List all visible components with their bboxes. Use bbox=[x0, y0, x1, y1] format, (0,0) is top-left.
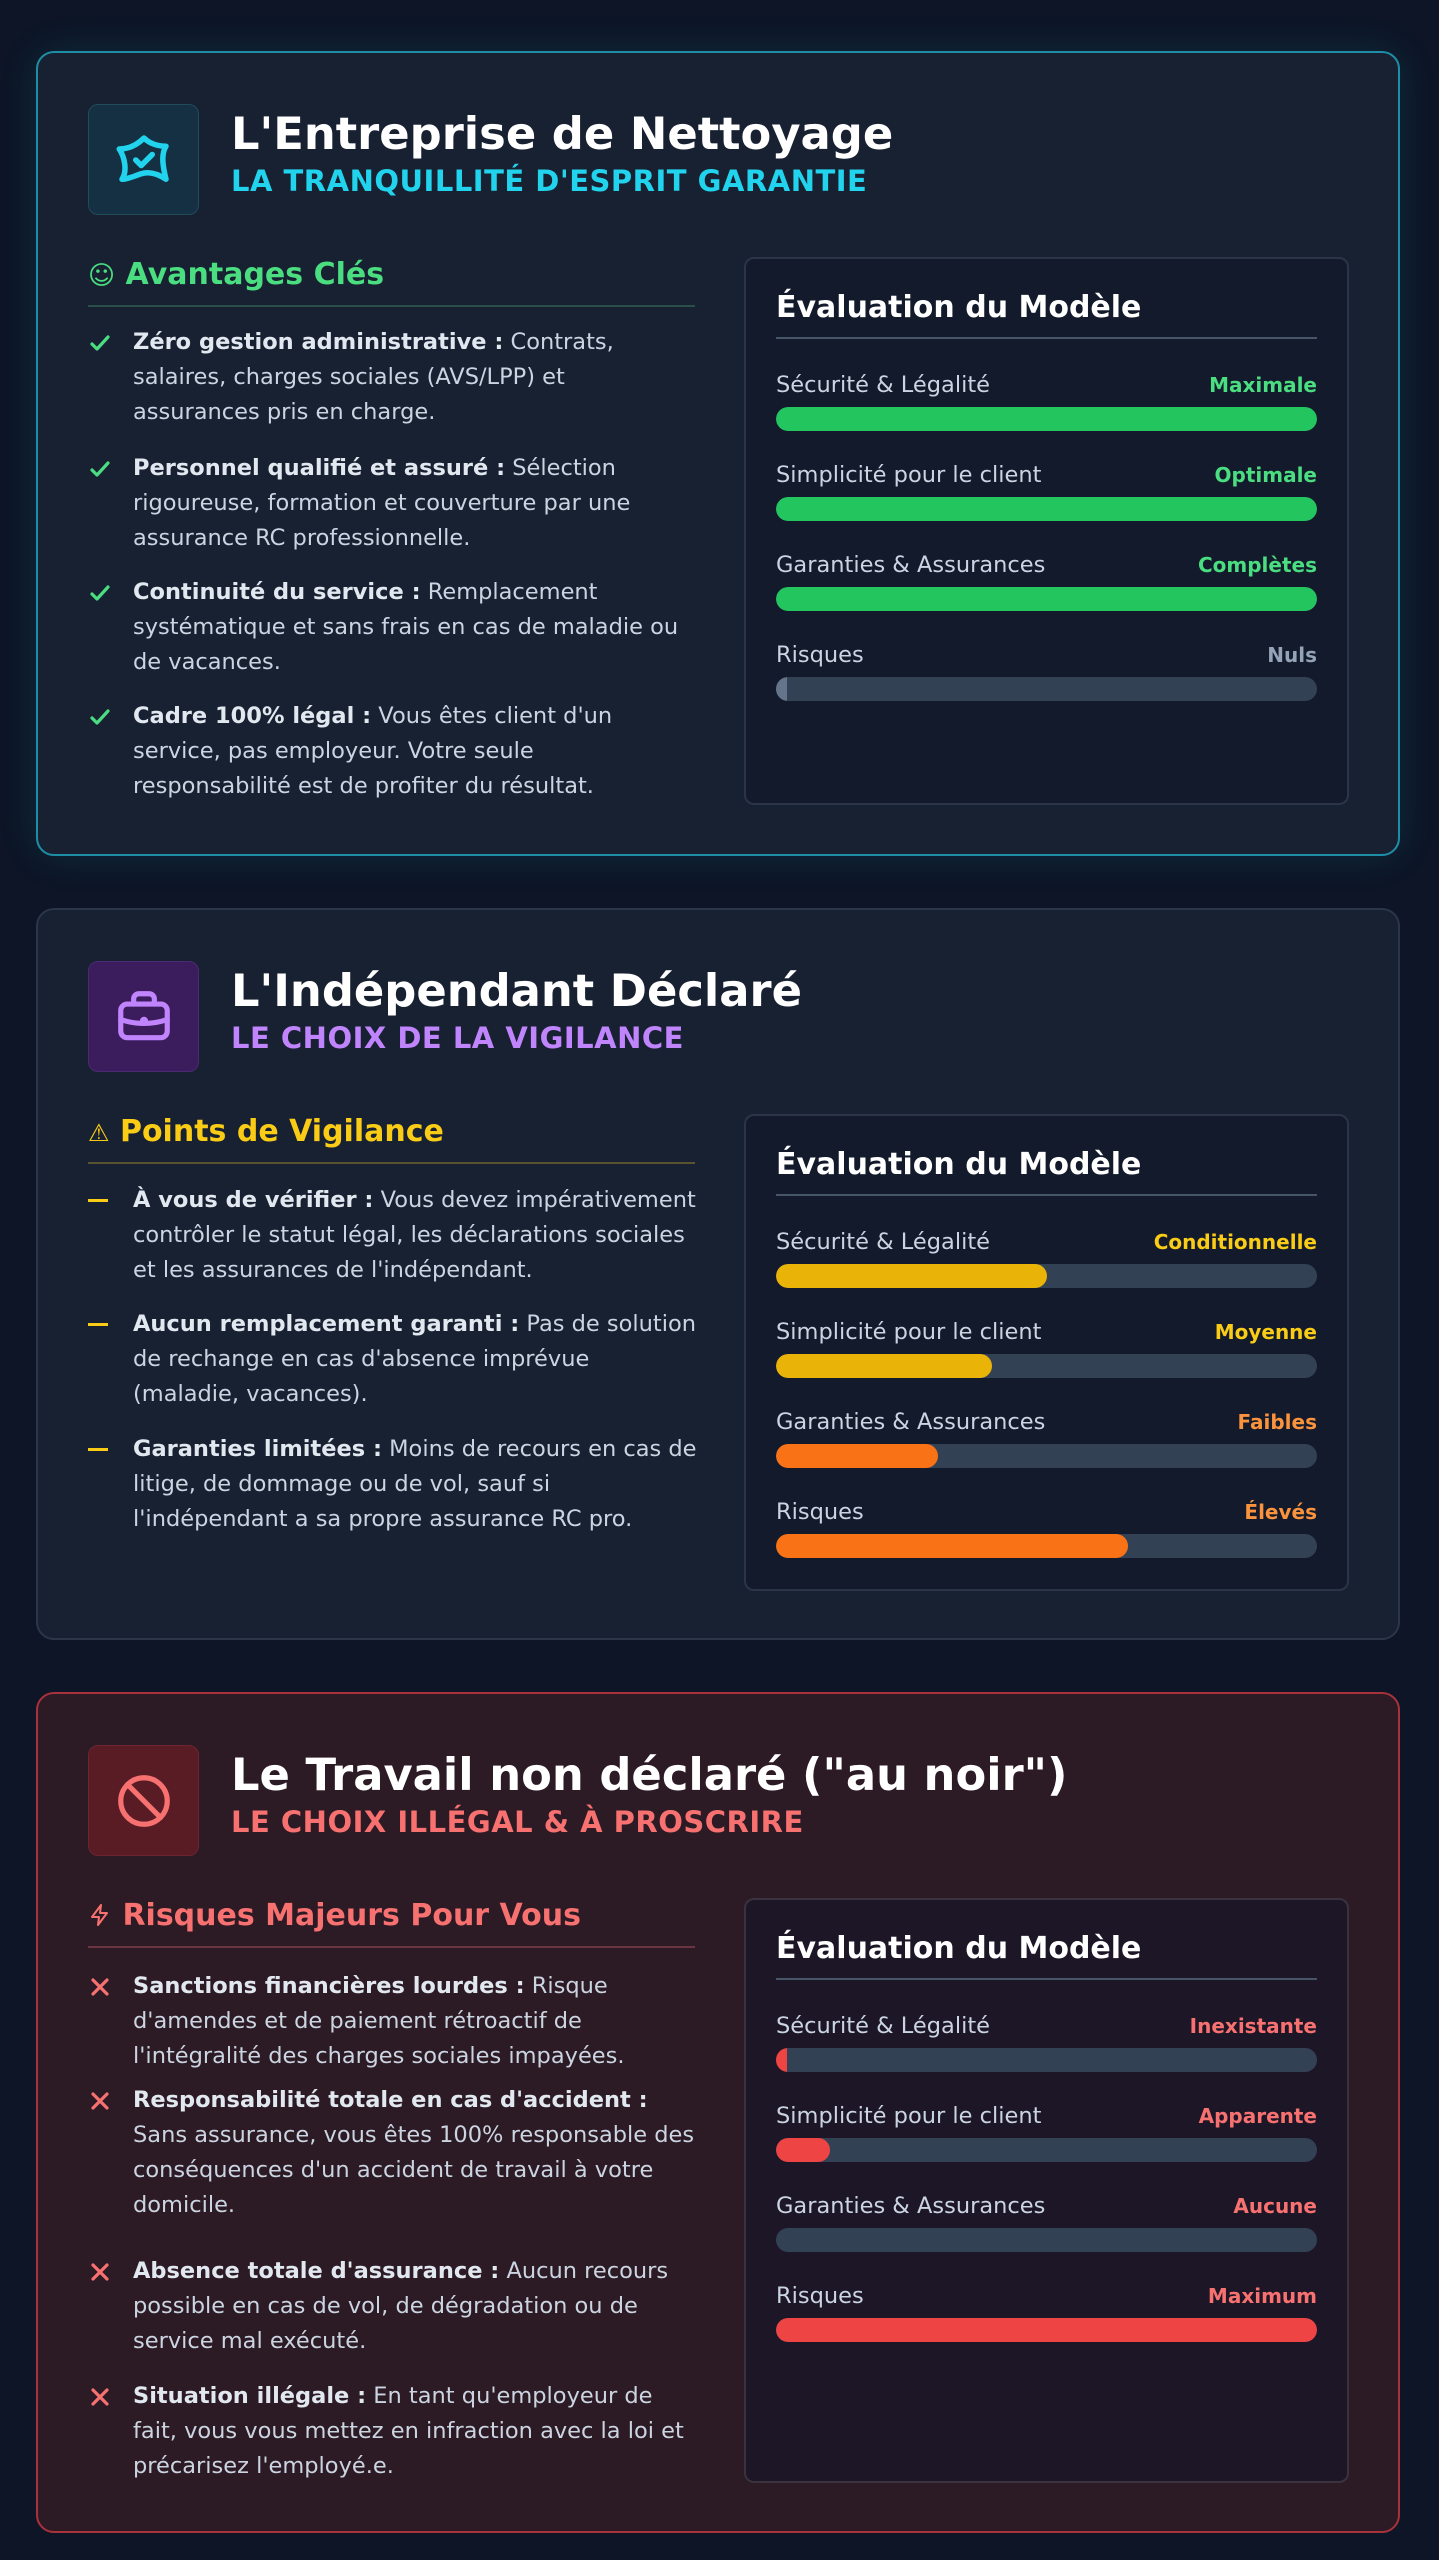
bar: garanties: Faibles bbox=[1238, 1410, 1317, 1434]
panel: travail non déclaré: Absence totale d'assurance : Aucun recours bbox=[133, 2258, 668, 2284]
bar: risques: Risques bbox=[776, 2283, 864, 2309]
icon: briefcase bbox=[88, 961, 199, 1072]
evaluation box bbox=[744, 1898, 1349, 2483]
panel: travail non déclaré: précarisez l'employé.e. bbox=[133, 2453, 394, 2479]
evaluation box bbox=[744, 257, 1349, 805]
bar: simplicité: Optimale bbox=[1214, 463, 1317, 487]
panel: travail non déclaré: Responsabilité totale en cas d'accident : bbox=[133, 2087, 648, 2113]
title: L'Entreprise de Nettoyage bbox=[231, 107, 893, 160]
evaluation box: Évaluation du Modèle bbox=[776, 290, 1141, 325]
panel: travail non déclaré: d'amendes et de paiement rétroactif de bbox=[133, 2008, 582, 2034]
list item 2 bbox=[91, 2087, 694, 2218]
heading: risques majeurs bbox=[88, 1898, 695, 1948]
bar: garanties: Complètes bbox=[1198, 553, 1317, 577]
bar: risques bbox=[776, 2283, 1317, 2342]
bar: garanties: Garanties & Assurances bbox=[776, 1409, 1045, 1435]
panel: entreprise de nettoyage: rigoureuse, formation et couverture par une bbox=[133, 490, 630, 516]
panel: indépendant déclaré: de rechange en cas d'absence imprévue bbox=[133, 1346, 589, 1372]
list item 3 bbox=[90, 579, 678, 675]
panel: indépendant déclaré: Garanties limitées : Moins de recours en cas de bbox=[133, 1436, 697, 1462]
list item 1 bbox=[88, 1186, 696, 1283]
list item 3 bbox=[91, 2258, 668, 2354]
bar: sécurité: Sécurité & Légalité bbox=[776, 1229, 990, 1255]
list item 4 bbox=[91, 2383, 684, 2479]
subtitle: LE CHOIX ILLÉGAL & À PROSCRIRE bbox=[231, 1805, 804, 1839]
list item 2 bbox=[88, 1311, 696, 1407]
bar: risques: Maximum bbox=[1208, 2284, 1317, 2308]
panel: indépendant déclaré: À vous de vérifier : Vous devez impérativement bbox=[133, 1187, 696, 1213]
panel: travail non déclaré bbox=[36, 1692, 1400, 2533]
bar: risques: Élevés bbox=[1244, 1500, 1317, 1524]
panel: entreprise de nettoyage: Personnel qualifié et assuré : Sélection bbox=[133, 455, 616, 481]
panel: entreprise de nettoyage: responsabilité est de profiter du résultat. bbox=[133, 773, 594, 799]
list item 3 bbox=[88, 1436, 697, 1532]
list item 4 bbox=[90, 703, 612, 799]
bar: risques bbox=[776, 1499, 1317, 1558]
panel: entreprise de nettoyage: service, pas employeur. Votre seule bbox=[133, 738, 534, 764]
bar: simplicité: Moyenne bbox=[1215, 1320, 1317, 1344]
bar: garanties bbox=[776, 552, 1317, 611]
panel: travail non déclaré: domicile. bbox=[133, 2192, 235, 2218]
panel: indépendant déclaré: l'indépendant a sa propre assurance RC pro. bbox=[133, 1506, 632, 1532]
subtitle: LE CHOIX DE LA VIGILANCE bbox=[231, 1021, 684, 1055]
panel: entreprise de nettoyage: assurance RC professionnelle. bbox=[133, 525, 470, 551]
bar: simplicité bbox=[776, 462, 1317, 521]
panel: travail non déclaré: service mal exécuté. bbox=[133, 2328, 366, 2354]
bar: simplicité: Simplicité pour le client bbox=[776, 1319, 1041, 1345]
list item 2 bbox=[90, 455, 630, 551]
bar: sécurité: Conditionnelle bbox=[1154, 1230, 1317, 1254]
panel: entreprise de nettoyage: Zéro gestion administrative : Contrats, bbox=[133, 329, 614, 355]
panel: travail non déclaré: possible en cas de vol, de dégradation ou de bbox=[133, 2293, 638, 2319]
bar: garanties bbox=[776, 2193, 1317, 2252]
panel: indépendant déclaré: et les assurances de l'indépendant. bbox=[133, 1257, 533, 1283]
bar: sécurité bbox=[776, 1229, 1317, 1288]
bar: risques: Nuls bbox=[1267, 643, 1317, 667]
bar: sécurité bbox=[776, 2013, 1317, 2072]
icon: prohibited bbox=[88, 1745, 199, 1856]
bar: simplicité: Simplicité pour le client bbox=[776, 462, 1041, 488]
heading: points de vigilance: ⚠ Points de Vigilance bbox=[88, 1114, 444, 1149]
bar: sécurité: Maximale bbox=[1209, 373, 1317, 397]
bar: sécurité: Sécurité & Légalité bbox=[776, 2013, 990, 2039]
title: L'Indépendant Déclaré bbox=[231, 964, 802, 1017]
title: Le Travail non déclaré ("au noir") bbox=[231, 1748, 1068, 1801]
panel: entreprise de nettoyage bbox=[36, 51, 1400, 856]
bar: simplicité: Apparente bbox=[1199, 2104, 1317, 2128]
panel: entreprise de nettoyage: de vacances. bbox=[133, 649, 281, 675]
bar: garanties: Garanties & Assurances bbox=[776, 2193, 1045, 2219]
panel: travail non déclaré: conséquences d'un accident de travail à votre bbox=[133, 2157, 653, 2183]
panel: travail non déclaré: Sans assurance, vous êtes 100% responsable des bbox=[133, 2122, 694, 2148]
bar: simplicité bbox=[776, 1319, 1317, 1378]
panel: travail non déclaré: Sanctions financières lourdes : Risque bbox=[133, 1973, 608, 1999]
icon: shield check bbox=[88, 104, 199, 215]
panel: indépendant déclaré bbox=[36, 908, 1400, 1640]
panel: travail non déclaré: fait, vous vous mettez en infraction avec la loi et bbox=[133, 2418, 684, 2444]
bar: risques: Risques bbox=[776, 642, 864, 668]
bar: sécurité: Inexistante bbox=[1190, 2014, 1317, 2038]
panel: entreprise de nettoyage: salaires, charges sociales (AVS/LPP) et bbox=[133, 364, 565, 390]
subtitle: LA TRANQUILLITÉ D'ESPRIT GARANTIE bbox=[231, 164, 867, 198]
evaluation box: Évaluation du Modèle bbox=[776, 1147, 1141, 1182]
bar: risques bbox=[776, 642, 1317, 701]
heading: risques majeurs: Risques Majeurs Pour Vous bbox=[122, 1898, 581, 1933]
evaluation box: Évaluation du Modèle bbox=[776, 1931, 1141, 1966]
panel: indépendant déclaré: Aucun remplacement garanti : Pas de solution bbox=[133, 1311, 696, 1337]
panel: indépendant déclaré: litige, de dommage ou de vol, sauf si bbox=[133, 1471, 550, 1497]
heading: avantages clés: ☺ Avantages Clés bbox=[88, 257, 384, 292]
panel: entreprise de nettoyage: Continuité du service : Remplacement bbox=[133, 579, 598, 605]
panel: indépendant déclaré: contrôler le statut légal, les déclarations sociales bbox=[133, 1222, 685, 1248]
bar: garanties: Garanties & Assurances bbox=[776, 552, 1045, 578]
panel: entreprise de nettoyage: systématique et sans frais en cas de maladie ou bbox=[133, 614, 678, 640]
bar: sécurité: Sécurité & Légalité bbox=[776, 372, 990, 398]
panel: travail non déclaré: l'intégralité des charges sociales impayées. bbox=[133, 2043, 625, 2069]
panel: entreprise de nettoyage: assurances pris en charge. bbox=[133, 399, 435, 425]
bar: risques: Risques bbox=[776, 1499, 864, 1525]
bar: sécurité bbox=[776, 372, 1317, 431]
bar: garanties: Aucune bbox=[1233, 2194, 1317, 2218]
bar: simplicité bbox=[776, 2103, 1317, 2162]
bar: simplicité: Simplicité pour le client bbox=[776, 2103, 1041, 2129]
list item 1 bbox=[90, 329, 614, 425]
list item 1 bbox=[91, 1973, 625, 2069]
panel: indépendant déclaré: (maladie, vacances). bbox=[133, 1381, 368, 1407]
bar: garanties bbox=[776, 1409, 1317, 1468]
panel: travail non déclaré: Situation illégale : En tant qu'employeur de bbox=[133, 2383, 653, 2409]
evaluation box bbox=[744, 1114, 1349, 1591]
panel: entreprise de nettoyage: Cadre 100% légal : Vous êtes client d'un bbox=[133, 703, 612, 729]
